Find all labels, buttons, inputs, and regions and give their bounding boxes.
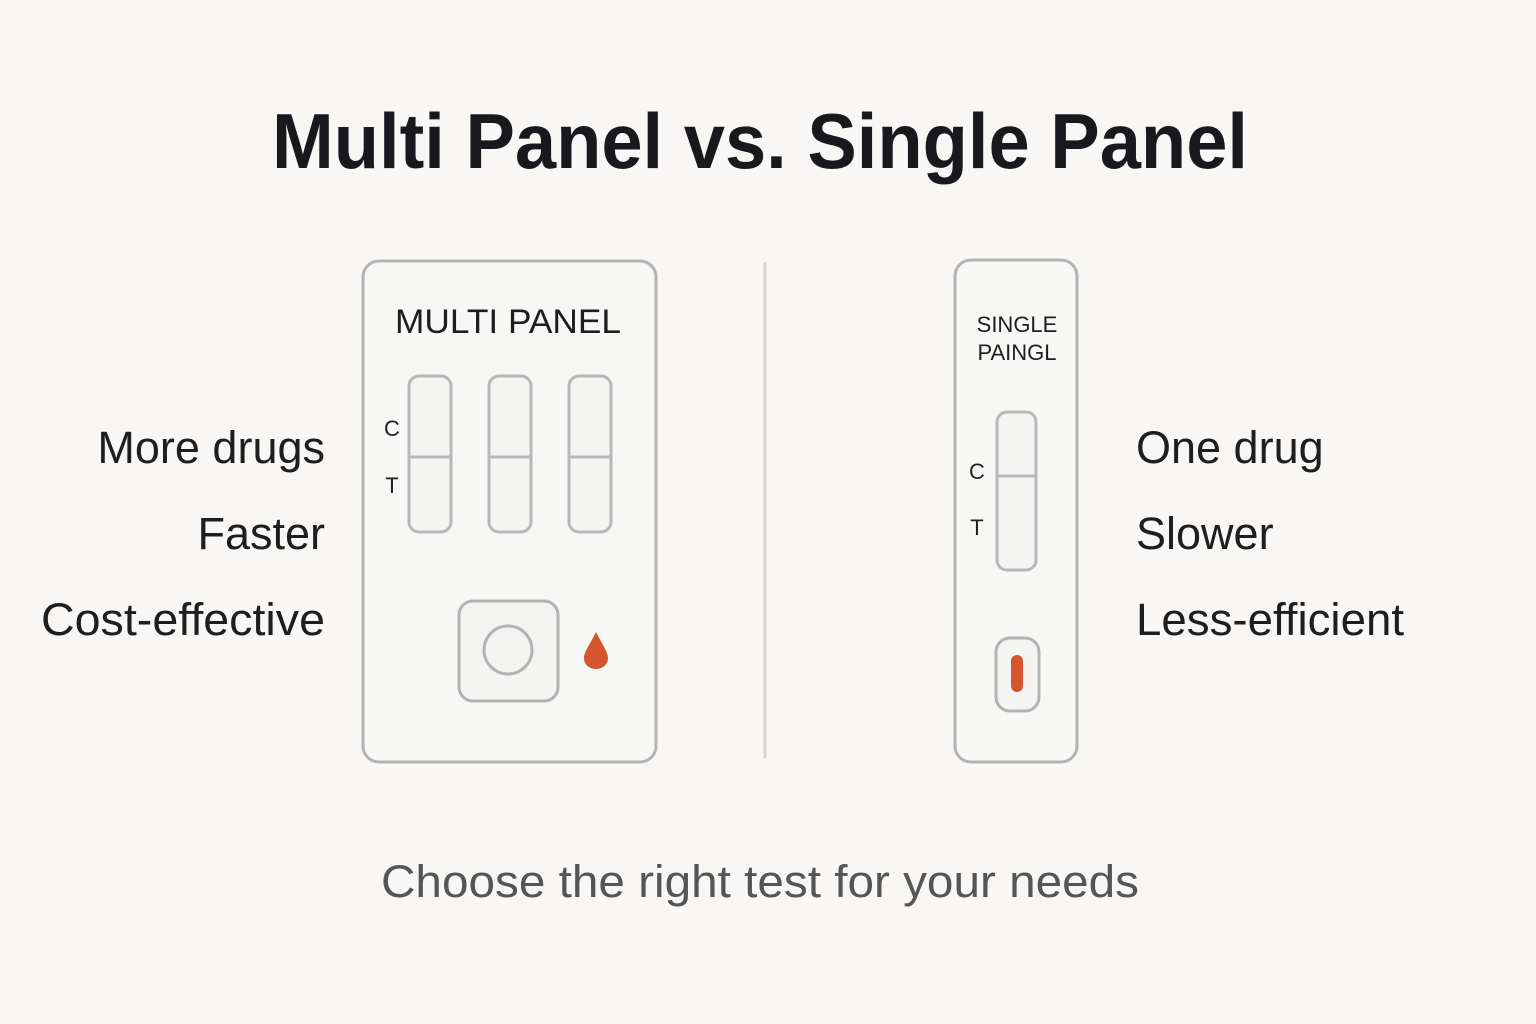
divider — [764, 262, 766, 758]
footer text: Choose the right test for your needs — [381, 856, 1139, 907]
left labels: multi panel benefits: More drugs — [97, 422, 325, 473]
title: Multi Panel vs. Single Panel — [272, 97, 1248, 185]
strips — [409, 376, 611, 532]
strip — [997, 412, 1036, 570]
C/T markers: C — [969, 459, 985, 484]
panel: multi panel test card — [363, 261, 656, 762]
panel: single panel test card: T — [970, 515, 984, 540]
right labels: single panel traits: Less-efficient — [1136, 594, 1405, 645]
panel: single panel test card — [955, 260, 1077, 762]
left labels: multi panel benefits: Faster — [197, 508, 325, 559]
left labels: multi panel benefits — [41, 422, 325, 645]
right labels: single panel traits: Slower — [1136, 508, 1274, 559]
left labels: multi panel benefits: Cost-effective — [41, 594, 325, 645]
single panel label: SINGLE — [977, 312, 1057, 337]
sample well — [459, 601, 558, 701]
sample well — [996, 638, 1039, 711]
icon: drop — [584, 632, 608, 669]
C/T markers: C — [384, 416, 400, 441]
right labels: single panel traits: One drug — [1136, 422, 1324, 473]
panel: multi panel test card: T — [385, 473, 399, 498]
panel: single panel test card: PAINGL — [977, 340, 1057, 365]
right labels: single panel traits — [1136, 422, 1405, 645]
multi panel label: MULTI PANEL — [395, 303, 621, 341]
